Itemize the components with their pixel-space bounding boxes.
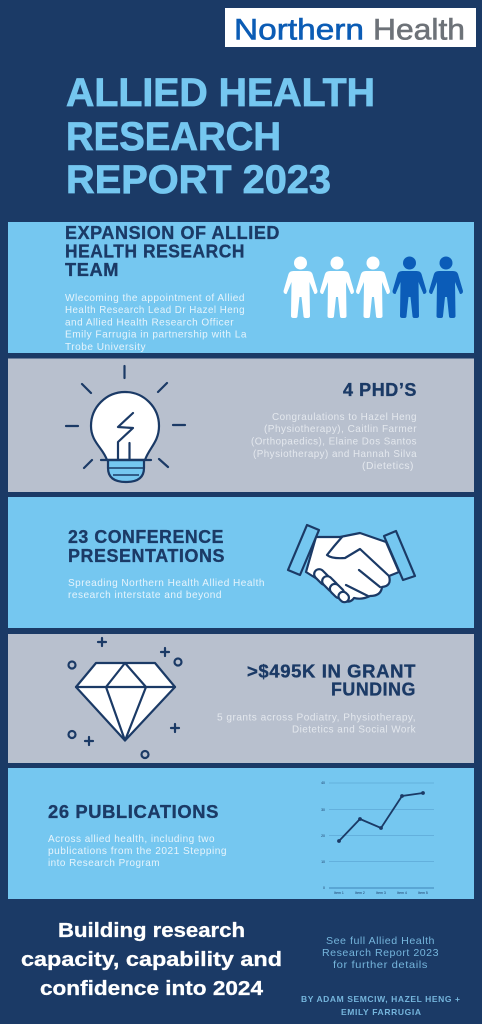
- text: PhD names: Congraulations to Hazel Heng: [272, 411, 417, 423]
- panel: research team expansion: [8, 222, 474, 353]
- line chart: 0: [323, 886, 325, 890]
- heading: conference presentations: PRESENTATIONS: [68, 545, 225, 566]
- panel: PhDs: [8, 358, 474, 492]
- text: see full report: [322, 935, 439, 971]
- closing statement: Building research: [58, 919, 245, 942]
- text: PhD names: (Physiotherapy), Caitlin Farmer: [264, 423, 417, 435]
- title: RESEARCH: [66, 115, 281, 159]
- heading: expansion of team: HEALTH RESEARCH: [65, 240, 245, 262]
- text: see full report: See full Allied Health: [326, 935, 435, 947]
- heading: grant funding: FUNDING: [331, 678, 416, 700]
- title: REPORT 2023: [66, 158, 331, 202]
- logo: Northern Health: [225, 8, 476, 47]
- line chart: Item 1: [334, 891, 344, 895]
- line chart: Item 4: [397, 891, 407, 895]
- text: team description: and Allied Health Research Officer: [65, 316, 234, 328]
- icon: diamond: [68, 638, 182, 758]
- text: authors: BY ADAM SEMCIW, HAZEL HENG +: [301, 994, 460, 1004]
- closing statement: [21, 919, 282, 1000]
- logo: Northern Health: Northern: [234, 14, 364, 46]
- text: grant description: [217, 712, 416, 736]
- heading: 4 PhDs: 4 PHD’S: [343, 379, 417, 400]
- panel: publications: [8, 768, 474, 899]
- heading: expansion of team: EXPANSION OF ALLIED: [65, 222, 280, 243]
- text: team description: [65, 292, 247, 353]
- text: publications description: publications from the 2021 Stepping: [48, 845, 227, 857]
- text: PhD names: (Orthopaedics), Elaine Dos Santos: [251, 436, 417, 448]
- closing statement: capacity, capability and: [21, 948, 282, 971]
- text: conference description: research interstate and beyond: [68, 589, 222, 601]
- text: PhD names: (Physiotherapy) and Hannah Silva: [253, 448, 417, 460]
- line chart: Item 3: [376, 891, 386, 895]
- heading: grant funding: [247, 660, 416, 700]
- heading: conference presentations: [68, 526, 225, 566]
- icon: light bulb: [66, 366, 185, 482]
- text: see full report: Research Report 2023: [322, 947, 439, 959]
- line chart: 30: [321, 808, 325, 812]
- heading: publications: 26 PUBLICATIONS: [48, 801, 219, 822]
- text: team description: Trobe University: [65, 341, 146, 353]
- panel: conference presentations: [8, 497, 474, 628]
- line chart: 40: [321, 781, 325, 785]
- text: authors: [301, 994, 460, 1017]
- text: authors: EMILY FARRUGIA: [341, 1007, 421, 1017]
- heading: grant funding: >$495K IN GRANT: [247, 660, 416, 682]
- title: ALLIED HEALTH: [66, 71, 375, 115]
- title: [66, 71, 375, 202]
- icon: five people: [284, 256, 463, 318]
- heading: expansion of team: TEAM: [65, 259, 119, 280]
- text: conference description: Spreading Northern Health Allied Health: [68, 577, 265, 589]
- text: team description: Wlecoming the appointment of Allied: [65, 292, 245, 304]
- heading: conference presentations: 23 CONFERENCE: [68, 526, 224, 547]
- line chart: 10: [321, 860, 325, 864]
- line chart: Item 2: [355, 891, 365, 895]
- text: see full report: for further details: [333, 959, 428, 971]
- logo: Northern Health: Health: [373, 14, 465, 46]
- line chart: Item 5: [418, 891, 428, 895]
- heading: expansion of team: [65, 222, 280, 280]
- panel: grant funding: [8, 634, 474, 763]
- text: grant description: 5 grants across Podiatry, Physiotherapy,: [217, 712, 416, 724]
- closing statement: confidence into 2024: [40, 977, 264, 1000]
- text: grant description: Dietetics and Social Work: [292, 724, 416, 736]
- text: conference description: [68, 577, 265, 601]
- icon: handshake: [288, 525, 415, 604]
- text: publications description: [48, 833, 227, 869]
- line chart: 20: [321, 834, 325, 838]
- text: PhD names: (Dietetics): [362, 460, 414, 472]
- text: publications description: Across allied health, including two: [48, 833, 215, 845]
- line chart: [321, 781, 434, 895]
- text: PhD names: [251, 411, 417, 472]
- text: team description: Emily Farrugia in partnership with La: [65, 328, 247, 340]
- text: team description: Health Research Lead Dr Hazel Heng: [65, 304, 245, 316]
- text: publications description: into Research Program: [48, 857, 160, 869]
